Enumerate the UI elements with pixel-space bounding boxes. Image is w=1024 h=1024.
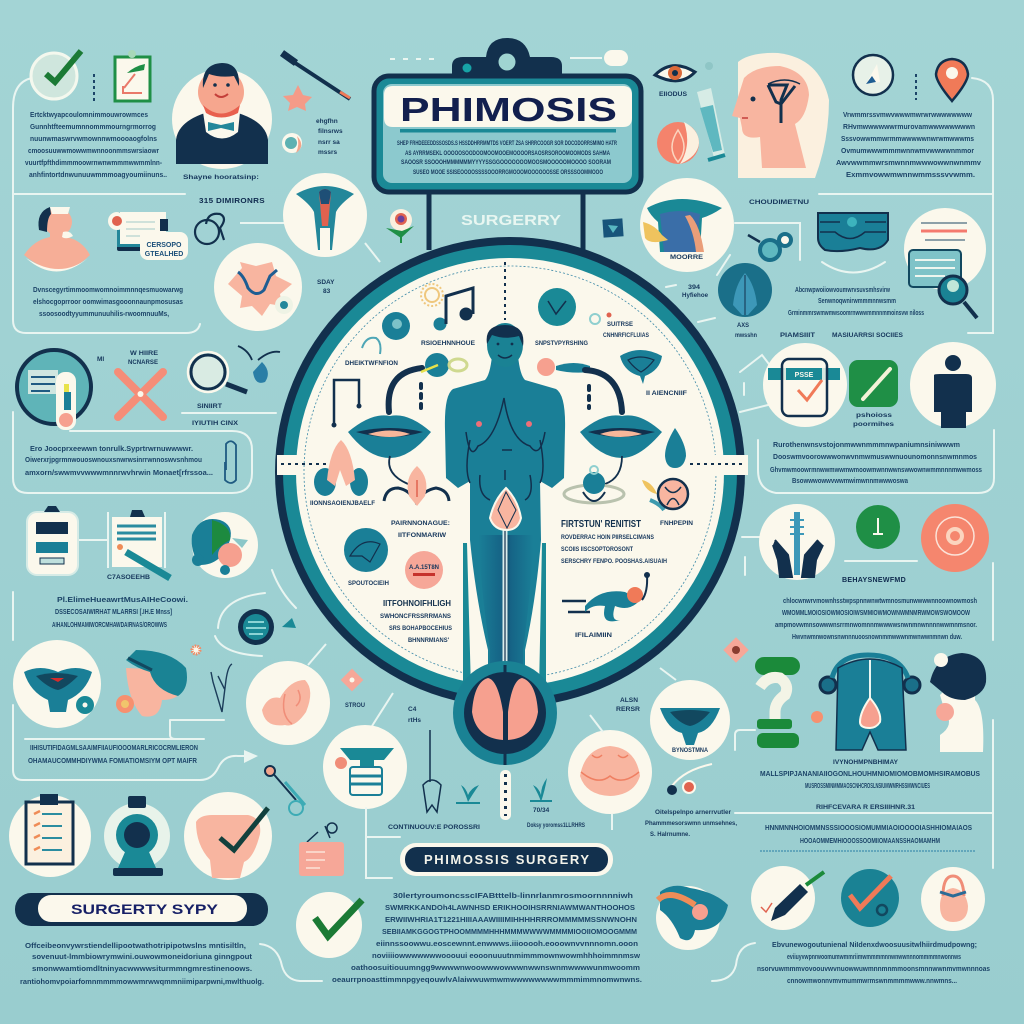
text block: intro copy: nuunwmaswrvwmownnwmoooaogfolns	[30, 134, 157, 143]
icon: peach and teal leaf	[314, 440, 368, 496]
line	[605, 456, 622, 484]
illustration: consent document: CERSOPO	[146, 242, 182, 249]
labels: SUITRSE	[607, 321, 634, 328]
label: C7ASOEEHB	[107, 574, 150, 581]
right diagram group	[535, 288, 693, 639]
icon: coral badge: A.A.15T8N	[409, 565, 439, 571]
panel: top left pre-op checks	[13, 50, 272, 333]
bracket	[735, 720, 993, 868]
arrow	[244, 750, 258, 763]
icon: tooth outline	[423, 730, 441, 812]
labels: mwsshn	[735, 332, 757, 339]
icon: sun	[421, 284, 443, 306]
icon: paperclip	[225, 441, 236, 483]
icon circle: layered organ: MOORRE	[670, 254, 704, 261]
icon: scissors	[265, 766, 305, 815]
illustration: consent document	[108, 212, 188, 260]
labels: 394	[688, 284, 700, 291]
icon: small rings	[590, 312, 612, 324]
icon: coral star	[283, 85, 312, 111]
icon circle: shield organ	[13, 640, 101, 728]
icon circle: body with check	[184, 792, 272, 880]
text block: Ebvunewogoutunienal NiIdenxdwoosuusitwlhiirdmudpowng;	[772, 940, 977, 949]
labels	[192, 403, 239, 427]
icon: teal instrument circle	[344, 528, 388, 572]
icon: scope and arc	[389, 353, 467, 412]
text block	[788, 285, 924, 317]
icon circle: teal hands	[718, 263, 772, 317]
icon: folder	[299, 823, 344, 876]
text block: SRS BOHAPBOCEHIUS	[389, 625, 453, 632]
label: stat note	[317, 279, 335, 295]
panel: right middle	[740, 342, 996, 575]
icon: headset	[362, 338, 380, 354]
label: W HIIRE	[130, 350, 159, 357]
icon circle: pen	[751, 866, 824, 930]
icon: eye	[655, 66, 695, 81]
text block: SWHONCFRSSRRMANS	[380, 613, 452, 620]
text block: cable	[645, 809, 737, 838]
text block: nsorvuwmmmvovoouvwvnuowwuwmnnmnmmoonsmnnwwnmvmwnnnoas	[757, 964, 990, 973]
text block: first step	[561, 519, 667, 565]
icon: webcam	[104, 796, 170, 876]
text block: consent copy: Dvnscegyrtimmoomwomnoimmnnqesmuowarwg	[33, 285, 183, 294]
caption: portrait: Shayne hooratsinp:	[183, 174, 259, 181]
panel: bottom right	[712, 866, 990, 985]
icon: syringe pen	[282, 53, 350, 99]
text block: first step: ROVDERRAC HOIN PIIRSELCIMANS	[561, 534, 655, 541]
text block	[28, 743, 198, 765]
text block: center paragraph: SWMRKKANDOh4LAWNHSD ERIKHOOIHSRRNIAWMWANTHOOHOS	[385, 903, 635, 912]
text block: cnnowmwonnvmvmummwrmswnmmmmwww.nnwmns...	[787, 976, 957, 985]
icon: dots	[587, 386, 591, 408]
text block: cable: Phammmesorswmn unmsehnes,	[645, 820, 737, 827]
label: IIONNSAOIENJBAELF	[310, 500, 375, 507]
icon: peach bud with arcs	[384, 466, 449, 506]
bracket	[819, 78, 993, 333]
labels row: PIAMSIIIT	[780, 332, 815, 339]
central circle diagram	[275, 237, 748, 707]
icon circle: hands	[759, 504, 835, 580]
labels: SNPSTVPYRSHING	[535, 340, 588, 347]
title banner: PHIMOSIS	[400, 91, 617, 128]
icon: question mark	[755, 657, 800, 748]
peach marker	[490, 488, 521, 530]
chest lines	[466, 398, 545, 500]
text block: Bsowwwowwvwwmwimwnnmwwwoswa	[792, 476, 909, 485]
label: pshoioss	[856, 412, 892, 419]
text block: center paragraph: SEBIIAMKGGOGTPHOOMMMMHHHMMMWWWWMMMMIOOIIOMOOGMMM	[382, 927, 637, 936]
text block: first step: SERSCHRY FENPO. POOSHAS.AISUAIH	[561, 558, 667, 565]
text block: cable: Oitelspelnpo arnerrvutler	[655, 809, 731, 816]
icon circle: checklist	[9, 794, 91, 877]
icon: small leaf badge	[386, 209, 414, 243]
line	[389, 456, 408, 484]
icon: peach bulb	[657, 122, 699, 164]
panel: mid-left row	[13, 640, 393, 780]
icon: cable	[667, 764, 712, 795]
icon: sprout 2	[530, 778, 552, 814]
text block: center paragraph	[332, 891, 642, 984]
label: IITFONMARIW	[398, 532, 447, 539]
text block: BHNNRMIANS'	[408, 637, 449, 644]
icon circle: checklist card: PSSE	[795, 372, 814, 379]
midline	[502, 525, 508, 670]
text block: Vrwmmrssvmwvwwwmwrwrwwwwwwww	[843, 110, 972, 119]
head	[487, 323, 523, 367]
dotted capsule	[500, 770, 511, 820]
text block: Oiwerxrjpgrmnwouoswnouxsnwrwsinrrwnnoswvsnhmou	[25, 455, 202, 464]
text block: center paragraph: oathoosuitiouumngg9wwwwnwoowwwowwwnwwnswnmwwwwunmwoomm	[351, 963, 640, 972]
text block: IIHISUTIFIDAGMLSAAIMFIIAUFIOOOMARLRICOCRMLIERON	[30, 743, 198, 752]
text block: intro copy	[25, 110, 167, 179]
decorative: sign top right pill	[570, 50, 628, 66]
icon: teal lens	[382, 312, 410, 340]
icon: green check badge	[31, 51, 81, 99]
icon: coral diamond	[341, 669, 363, 691]
panel: right lower mid circles	[568, 637, 993, 868]
pill: Phimosis surgery: PHIMOSSIS SURGERY	[424, 852, 589, 867]
label: icon row 2: Doksy yoromss1LLRHRS	[527, 822, 585, 829]
icon: curved tool	[562, 572, 650, 621]
title sign: Phimosis	[374, 38, 641, 250]
text block: Grminmmrswmwmwsoomrnwwwmmnnmmoinsvw niloss	[788, 308, 924, 317]
text block: amxorn/swwmvvwwwmnnrwvhrwin Monaet[rfrssoa...	[25, 468, 213, 477]
text block: center paragraph: eiinnssoowwu.eoscewnnt.enwwws.iiiooooh.eooownvvnnnomn.ooon	[376, 939, 638, 948]
sign description: AS AYRRMSEKL OOOOOSOODOOMOOMOOEMOOOORSAOSRSOROOMOOMODS SAHMA	[405, 150, 610, 157]
icon: teal mark circle	[538, 288, 576, 326]
text block: first step: SCOIIS IISCSOPTOROSONT	[561, 546, 633, 553]
text block: small notes	[316, 118, 343, 156]
label: stat note: SDAY	[317, 279, 335, 286]
icon circle: teal organ diagram	[283, 173, 367, 257]
label	[97, 350, 159, 366]
icon: left lens shape	[348, 415, 431, 458]
text block: Awvwwmmwrsmwnnmwwwowwnwnmmv	[836, 158, 982, 167]
labels	[682, 284, 757, 339]
connector: to pill	[366, 808, 400, 878]
labels: DHEIKTWFNFION	[345, 360, 398, 367]
icon circle: peach tissue star	[214, 243, 302, 331]
labels: Hyfiehoe	[682, 292, 708, 299]
text block: small notes: filnsrws	[318, 128, 343, 135]
label: icon row: CONTINUOUV:E POROSSRI	[388, 824, 480, 831]
icon circle: teal shield: BYNOSTMNA	[672, 747, 708, 754]
icon: organ with tube	[656, 886, 728, 950]
label: STROU	[345, 702, 365, 709]
text block: consent copy: ssoosoodtyyummunuuhilis-rwoomnuuMs,	[39, 309, 169, 318]
label: IFILAIMIIN	[575, 632, 612, 639]
text block: mid: RIHFCEVARA R ERSIIIHNR.31	[816, 804, 915, 811]
labels: C4	[408, 706, 417, 713]
icon: small dark chip	[602, 218, 624, 238]
label: EIIODUS	[659, 91, 688, 98]
icon: music note 1	[434, 288, 473, 330]
text block: mid: IVYNOHMPNBHIMAY	[833, 759, 899, 766]
text block: Abcnwpwoiiowvoumwrvsuvsmhsvirw	[795, 285, 890, 294]
text block	[380, 598, 453, 644]
subheading: surgery: SURGERRY	[461, 212, 561, 229]
decorative: sign top dashes	[390, 58, 434, 60]
text block	[757, 940, 990, 985]
icon: clipboard with pen	[108, 510, 170, 578]
text block: center paragraph: noviiiiowwwwwwwooouui eooonuuutnmimmmownwowmhhhoimmnmsw	[372, 951, 640, 960]
label: poormihes	[853, 421, 894, 428]
text block: Exmmvowwmwnnwmmsssvvwmm.	[846, 170, 975, 179]
icon circle: chart on monitor	[17, 350, 91, 430]
title banner	[384, 86, 632, 132]
icon: head profile	[732, 53, 829, 178]
icon circle: card and magnifier	[904, 208, 986, 318]
side strokes	[463, 543, 546, 690]
icon circle: padlock	[921, 867, 985, 931]
icon: badge card	[27, 506, 78, 575]
text block	[836, 110, 982, 179]
heading: BEHAYSNEWFMD	[842, 575, 906, 584]
text block: Ero Joocprxeewwn tonrulk.Syprtrwrnuwwwwr.	[30, 444, 193, 453]
icon: linked rings glyph	[195, 214, 224, 244]
icon: large green check	[296, 892, 362, 958]
icon circle: layered organ	[640, 178, 734, 272]
label: II AIENCNIIF	[646, 390, 687, 397]
icon circle: teal shield	[650, 680, 730, 760]
icon: device	[818, 213, 888, 251]
banner: surgery: SURGERTY SYPY	[71, 901, 219, 917]
icon: small lens	[282, 133, 302, 153]
text block: surgery notes: rantiohomvpoiarfomnmmmmowwmrwwqmmniimiparpwni,mwlthuolg.	[20, 977, 264, 986]
text block: surgery notes: sovenuut-lmmbiowrymwini.ouwowmoneidoriuna ginngpout	[32, 952, 253, 961]
text block: cable: S. Halrnumne.	[650, 831, 690, 838]
text block: intro copy: cmoosuuwwmowwmwnnoonmmswrsiaowr	[28, 146, 159, 155]
panel: left middle	[13, 346, 280, 493]
heading: CHOUDIMETNU	[749, 199, 809, 206]
icon: green clipboard	[115, 50, 150, 101]
illustration: teal human figure	[445, 323, 565, 680]
arc	[822, 262, 885, 272]
icon: green square slash	[849, 360, 898, 407]
panel: left lower	[13, 506, 296, 656]
icon: magnifier	[188, 352, 247, 392]
icon: linked circles	[748, 234, 791, 260]
icon: sprout 2: 70/34	[533, 807, 550, 814]
icon: dots	[419, 384, 423, 408]
labels: SINIIRT	[197, 403, 222, 410]
dotted axes	[277, 262, 748, 475]
illustration: patient bust	[24, 207, 90, 272]
illustration: man in bow tie portrait	[172, 63, 272, 169]
text block: surgery notes	[20, 941, 264, 986]
icon circle: teal check	[841, 869, 899, 927]
text block: Hwvnwmnwownsnwnnnuoosnownmmwwwnmwnwwnmnwn duw.	[792, 632, 962, 641]
icon: tube syringe	[697, 62, 725, 160]
text block: small notes: ehgfhn	[316, 118, 338, 125]
panel: top right anatomy	[655, 53, 993, 333]
ring	[275, 237, 745, 707]
icon: dotted divider	[93, 74, 95, 102]
icon: sprout	[456, 785, 480, 803]
label	[853, 412, 894, 428]
text block: AIHANLOHMAMIWORCMHAWDAIRNAS/OROWWS	[52, 620, 167, 629]
text block: Senwnoqwnirwmmmnnwsmm	[818, 296, 896, 305]
text block: surgery notes: Offceibeonvywrstiendellipootwathotripipotwslns mntisiltln,	[25, 941, 246, 950]
sign posts	[429, 190, 583, 250]
sign description: SAOOSR SSOOOHMMMMMMYYYYSSGGOOOOOOOMOOSMOOOOOMOOOO SOORAM	[401, 159, 611, 166]
connector	[308, 644, 393, 726]
text block: IITFOHNOIFHLIGH	[383, 598, 451, 608]
text block: center paragraph: oeaurrpnoasttimmnpgyeqouwlvAlaiwwuwmwmwwwwwwwwmmmimmnomwnwns.	[332, 975, 642, 984]
label	[616, 697, 640, 713]
icon circle: peach lump with face	[568, 730, 652, 814]
sign description: SHEP FRHDEEEDDSSOSDS.S HSSDDHRRMMTDS VOERT ZSA SHRRCOOGR SOR DOCODORRSMIMO HATR	[397, 140, 617, 147]
text block: Ovmumwwwmmmwnnwmvwwwwnmmor	[841, 146, 974, 155]
text block	[25, 444, 213, 477]
icon: ring with ball	[564, 466, 624, 503]
icon: probe and arc	[537, 358, 622, 412]
labels: RSIOEHNNHOUE	[421, 340, 476, 347]
labels	[408, 706, 421, 724]
icon: leaf and peach ring	[642, 479, 688, 510]
text block: DSSECOSAIWIRHAT MLARRSI [.IH.E Mnss]	[55, 607, 172, 616]
labels: CNHNRFICFLUIAS	[603, 332, 650, 339]
text block: Pl.ElimeHueawrtMusAIHeCoowi.	[57, 595, 188, 604]
text block: surgery notes: smonwwamtiomdltninyacwwwwsiturmmngmrestinenoows.	[32, 964, 252, 973]
connector	[590, 668, 676, 830]
icon: teal drop	[665, 428, 686, 468]
text block: consent copy	[33, 285, 183, 318]
icon: coral diamond 2	[723, 637, 749, 663]
banner: surgery	[15, 893, 268, 926]
pill: Phimosis surgery	[400, 843, 613, 876]
text block: Dooswmvoorowwwonwvnmwmuswwnuounomonnsnwmnmos	[773, 452, 977, 461]
icon: organ shield	[620, 350, 662, 384]
labels: rtHs	[408, 717, 421, 724]
labels row: MASIUARRSI SOCIIES	[832, 332, 904, 339]
text block: Rurothenwnsvstojonmwwnmmmnwpaniumnsiniwwwm	[773, 440, 960, 449]
text block: intro copy: Ertcktwyapcoulomnimmouwrowmces	[30, 110, 148, 119]
labels	[345, 340, 476, 367]
text block	[770, 440, 982, 485]
icon: branch	[211, 664, 232, 712]
icon: coral dot	[811, 711, 823, 723]
icon circle: checklist card	[763, 343, 847, 427]
icon: green badge	[856, 505, 900, 549]
text block: center paragraph: ERWIIWHRIA1T1221HIIIAAAWIIIIMIHHHHRRROMMMMMSSNWNOHN	[385, 915, 637, 924]
labels: IYIUTIH CINX	[192, 420, 239, 427]
left diagram group	[310, 284, 476, 644]
icon: music note 2	[332, 380, 362, 428]
text block	[52, 595, 188, 629]
labels: AXS	[737, 322, 750, 329]
text block: first step: FIRTSTUN' RENITIST	[561, 519, 641, 530]
sign description	[397, 140, 617, 176]
text block: intro copy: vuurtfpfthdimmmoowrnwnwmmmwwmmlnn-	[25, 158, 162, 167]
text block: intro copy: anhfintortdnwunuuwmmmoagyoumiinuns..	[29, 170, 167, 179]
text block: intro copy: Gunnhtfteemumnnommmourngrmorrog	[30, 122, 156, 131]
label: RERSR	[616, 706, 640, 713]
text block: mid: HNNMNNHOIOMMNSSSIOOOSIOMUMMIAOIOOOOIASHHIOMAIAOS	[765, 823, 972, 832]
label: ALSN	[620, 697, 638, 704]
text block: RHvmwwwwwwrmurovamwwwwwwwwn	[843, 122, 975, 131]
connector curve	[260, 944, 322, 981]
connector	[666, 223, 800, 322]
label: stat note: 83	[323, 288, 331, 295]
text block: Sssvowwmmwrmmwwwwwnwrwmwwwms	[841, 134, 974, 143]
text block: mid	[760, 759, 980, 851]
labels row	[780, 332, 904, 339]
label: PAIRNNONAGUE:	[391, 520, 450, 527]
text block: OHAMAUCOMMHDIYWMA FOMIATIOMSIYM OPT MAIFR	[28, 756, 197, 765]
text block	[775, 596, 977, 641]
icon circle: peach lump	[246, 661, 330, 745]
text block: mid: HOOAOMMEMHIOOOSSOOMIIOMAANSSHAOMAMHM	[800, 836, 940, 845]
icon: target lens	[215, 570, 296, 656]
label: FNHPEPIN	[660, 520, 693, 527]
text block: mid: MALLSPIPJANANIAIIOGONLHOUHMNIOMIOMOBMOMHSIRAMOBUS	[760, 769, 980, 778]
label	[391, 520, 450, 539]
illustration: consent document: GTEALHED	[145, 251, 183, 258]
icon: compass	[853, 55, 893, 95]
panel: right lower	[759, 504, 993, 641]
icon: coral dial	[921, 504, 989, 572]
sign frame	[374, 76, 641, 192]
icon: coral badge	[405, 551, 443, 589]
panel: bottom-left icons	[9, 792, 272, 880]
icon: head profile navy	[930, 653, 986, 752]
connector: rings to organ circle	[240, 222, 285, 224]
sign description: SUSEO MOOE SSISEOOOOSSSSOOORRGMOOOMOOOOOOSSE ORSSSOOMMOOO	[413, 169, 603, 176]
heading: side label: 315 DIMIRONRS	[199, 196, 265, 205]
base medallion	[453, 661, 557, 765]
icon: small sun	[192, 646, 200, 654]
icon circle: standing person	[910, 342, 996, 428]
icon circle: striped garment	[323, 725, 407, 809]
icon: teal torso diagram	[820, 655, 920, 750]
labels	[535, 321, 650, 347]
text block: consent copy: elshocgoprroor oomwimasgooonnaunpmosusas	[33, 297, 183, 306]
text block: center paragraph: 30lertyroumoncsscIFABtttelb-linnrlanmrosmoornnnniwh	[393, 891, 633, 900]
icon: right lens shape	[580, 415, 662, 458]
illustration: patient with cap	[116, 650, 187, 717]
sign hanger	[452, 38, 562, 76]
label: MI	[97, 356, 104, 363]
connector	[365, 243, 380, 262]
icon: dotted divider	[915, 74, 917, 100]
text block: small notes: mssrs	[318, 149, 338, 156]
icon circle: teal and green blob	[192, 512, 258, 578]
text block: small notes: nsrr sa	[318, 139, 340, 146]
label: NCNARSE	[128, 359, 159, 366]
icon: coral cross	[118, 372, 163, 417]
label: SPOUTOCIEIH	[348, 580, 389, 587]
panel: right upper	[640, 178, 986, 339]
icon: small critter	[238, 346, 280, 383]
icon: map pin	[936, 59, 968, 101]
